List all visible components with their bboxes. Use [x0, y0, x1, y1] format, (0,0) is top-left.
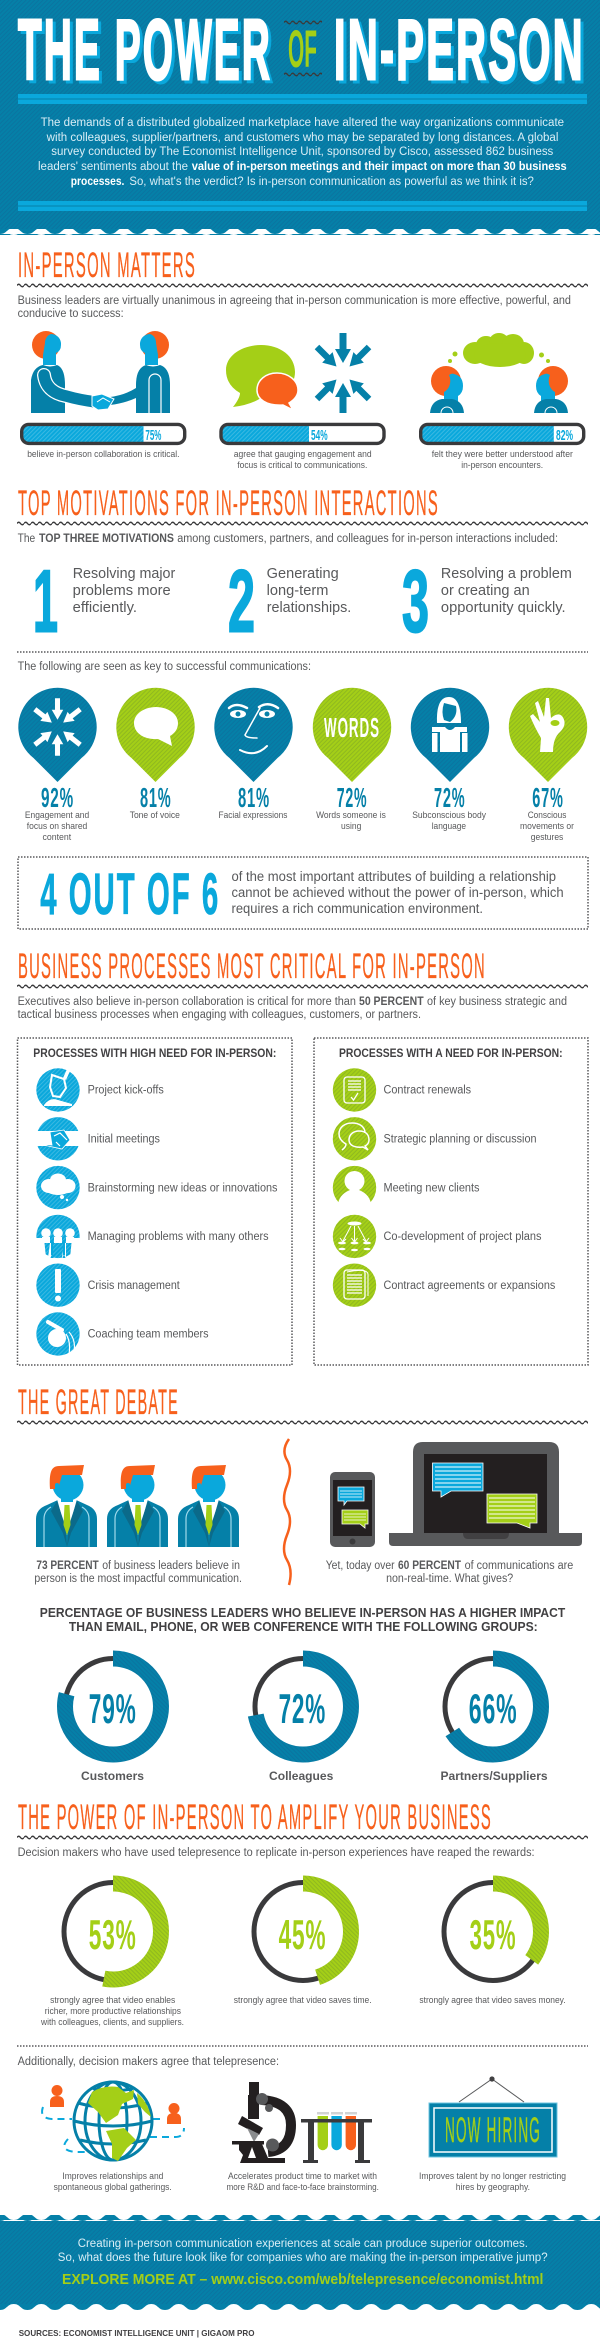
callout: 4 out of 6: 4 OUT OF 6: [40, 862, 220, 927]
icon: converging arrows: [312, 333, 374, 413]
donut: 53%: [40, 1882, 184, 2027]
callout: 4 out of 6: cannot be achieved without the power of in-person, which: [232, 885, 564, 900]
text: 60 percent: Yet, today over: [326, 1560, 395, 1572]
captions: telepresence benefits: Improves talent by no longer restricting: [419, 2171, 566, 2181]
footer banner: [0, 2215, 600, 2310]
donut: customers 79%: Customers: [81, 1769, 144, 1783]
section heading: the great debate: [17, 1383, 588, 1425]
section heading: the great debate: THE GREAT DEBATE: [18, 1383, 179, 1422]
icon: chat bubbles: [226, 345, 298, 410]
icon: phone: [330, 1472, 375, 1547]
donut: 53%: strongly agree that video enables: [50, 1995, 176, 2005]
pin: words 72%: using: [341, 821, 361, 831]
panel: processes with a need: [314, 1038, 588, 1365]
donut: customers 79%: [65, 1658, 161, 1783]
motivation 1: [33, 552, 175, 650]
section heading: in-person matters: [17, 246, 588, 288]
pin: gestures 67%: Conscious: [528, 810, 567, 820]
donut: partners/suppliers 66%: Partners/Suppliers: [440, 1769, 548, 1783]
donut: 45%: strongly agree that video saves time.: [234, 1995, 372, 2005]
header banner: [0, 0, 600, 235]
pin: tone of voice 81%: 81%: [140, 782, 172, 813]
subheading: percentage of business leaders: PERCENTAGE OF BUSINESS LEADERS WHO BELIEVE IN-PERSON HAS A HIGHER IMPACT: [40, 1605, 565, 1620]
business processes text: 50 PERCENT: [359, 996, 424, 1008]
business processes text: Executives also believe in-person collaboration is critical for more than: [18, 996, 356, 1008]
motivation 3: [402, 552, 572, 650]
captions: telepresence benefits: Improves relationships and: [62, 2171, 163, 2181]
intro paragraph: value of in-person meetings and their impact on more than 30 business: [192, 161, 567, 173]
bar captions: believe in-person collaboration is critical.: [27, 449, 180, 459]
motivations intro: among customers, partners, and colleagues for in-person interactions included:: [177, 533, 558, 545]
progress bar 54%: 54%: [311, 427, 328, 444]
pin: tone of voice 81%: [116, 688, 195, 820]
panel: high need processes: PROCESSES WITH HIGH NEED FOR IN-PERSON:: [33, 1048, 276, 1060]
item: crisis management: [36, 1264, 181, 1307]
pin: engagement 92%: Engagement and: [25, 810, 89, 820]
bar captions: focus is critical to communications.: [237, 460, 367, 470]
title: THE POWER: [18, 3, 272, 98]
title: THE POWER: [21, 6, 275, 101]
intro paragraph: with colleagues, supplier/partners, and customers who may be separated by long distances. A global: [46, 132, 558, 144]
motivation 1: Resolving major: [73, 566, 175, 582]
footer banner: EXPLORE MORE AT – www.cisco.com/web/telepresence/economist.html: [62, 2272, 543, 2288]
motivations intro: TOP THREE MOTIVATIONS: [39, 533, 174, 545]
item: meeting new clients: Meeting new clients: [384, 1182, 480, 1194]
icon: handshake: [31, 331, 170, 413]
motivation 3: opportunity quickly.: [441, 600, 566, 616]
captions: telepresence benefits: more R&D and face-to-face brainstorming.: [226, 2182, 379, 2192]
in-person matters text: [18, 295, 571, 320]
pin: words 72%: [313, 688, 391, 831]
amplify intro: Decision makers who have used telepresence to replicate in-person experiences have reaped the rewards:: [18, 1847, 535, 1859]
motivation 1: efficiently.: [73, 600, 137, 616]
donut: 45%: [234, 1882, 372, 2005]
item: initial meetings: [36, 1117, 160, 1161]
callout: 4 out of 6: of the most important attributes of building a relationship: [232, 869, 556, 884]
item: contract agreements: [333, 1264, 556, 1307]
sources: SOURCES: ECONOMIST INTELLIGENCE UNIT | GIGAOM PRO: [19, 2328, 255, 2338]
pin: words 72%: WORDS: [324, 712, 380, 743]
text: 73 percent: 73 PERCENT: [36, 1560, 99, 1572]
item: project kick-offs: [36, 1068, 164, 1112]
icon: thought cloud and two people: [430, 333, 568, 413]
donut: partners/suppliers 66%: 66%: [469, 1685, 517, 1732]
business processes text: of key business strategic and: [427, 996, 567, 1008]
text: 60 percent: of communications are: [465, 1560, 573, 1572]
pin: gestures 67%: [509, 688, 587, 842]
pin: gestures 67%: gestures: [531, 832, 564, 842]
progress bar 54%: [221, 424, 384, 444]
donut: 35%: 35%: [470, 1911, 516, 1958]
pin: body language 72%: Subconscious body: [412, 810, 486, 820]
intro paragraph: So, what's the verdict? Is in-person communication as powerful as we think it is?: [129, 176, 534, 188]
item: crisis management: Crisis management: [88, 1280, 181, 1292]
panel: high need processes: [18, 1038, 292, 1365]
donut: colleagues 72%: [255, 1658, 351, 1783]
donut: partners/suppliers 66%: [440, 1658, 548, 1783]
motivation 2: [228, 552, 351, 650]
motivation 1: problems more: [73, 583, 171, 599]
bar captions: [27, 449, 573, 470]
item: meeting new clients: [333, 1166, 480, 1212]
item: strategic planning: Strategic planning or discussion: [384, 1134, 536, 1146]
donut: 35%: [419, 1882, 566, 2005]
text: 73 percent: [34, 1560, 242, 1585]
text: 73 percent: person is the most impactful communication.: [34, 1573, 242, 1585]
progress bar 75%: [22, 424, 185, 444]
donut: 53%: richer, more productive relationships: [45, 2006, 181, 2016]
icon: laptop: [389, 1442, 582, 1546]
progress bar 82%: [421, 424, 584, 444]
item: contract renewals: [333, 1068, 471, 1112]
icon: globe with people: [42, 2082, 184, 2161]
business processes text: [18, 996, 567, 1021]
intro paragraph: The demands of a distributed globalized marketplace have altered the way organizations communicate: [41, 117, 564, 129]
motivations intro: [18, 533, 558, 545]
text: 60 percent: [326, 1560, 573, 1585]
title: OF: [288, 20, 317, 79]
item: coaching: Coaching team members: [88, 1329, 209, 1341]
icon: microscope: [232, 2082, 291, 2163]
donut: 45%: 45%: [279, 1911, 326, 1958]
subheading: percentage of business leaders: THAN EMAIL, PHONE, OR WEB CONFERENCE WITH THE FOLLOWING GROUPS:: [69, 1619, 538, 1634]
motivation 3: 3: [402, 552, 429, 650]
item: contract renewals: Contract renewals: [384, 1084, 471, 1096]
motivation 3: Resolving a problem: [441, 566, 572, 582]
pin: body language 72%: 72%: [434, 782, 465, 813]
pin: facial expressions 81%: 81%: [238, 782, 270, 813]
intro paragraph: leaders' sentiments about the: [38, 161, 188, 173]
subheading: percentage of business leaders: [40, 1605, 565, 1634]
item: brainstorming: [36, 1166, 278, 1209]
pin: facial expressions 81%: [214, 688, 293, 820]
callout: 4 out of 6: requires a rich communication environment.: [232, 901, 483, 916]
pin: gestures 67%: movements or: [520, 821, 574, 831]
item: co-development: Co-development of project plans: [384, 1231, 542, 1243]
text: 60 percent: non-real-time. What gives?: [386, 1573, 513, 1585]
footer banner: So, what does the future look like for companies who are making the in-person imperative jump?: [58, 2252, 548, 2264]
key communications intro: The following are seen as key to successful communications:: [18, 661, 311, 673]
additional benefits intro: Additionally, decision makers agree that telepresence:: [18, 2056, 279, 2068]
pin: gestures 67%: 67%: [532, 782, 564, 813]
section heading: in-person matters: IN-PERSON MATTERS: [18, 246, 196, 285]
pin: body language 72%: [411, 688, 489, 831]
intro paragraph: processes.: [71, 176, 124, 188]
item: coaching: [36, 1312, 209, 1356]
in-person matters text: conducive to success:: [18, 308, 124, 320]
icon: now hiring sign: [429, 2076, 557, 2157]
business processes text: tactical business processes when engaging with colleagues, customers, or partners.: [18, 1009, 421, 1021]
icon: three business people: [36, 1465, 239, 1547]
pin: engagement 92%: content: [42, 832, 72, 842]
intro paragraph: [38, 117, 567, 188]
item: brainstorming: Brainstorming new ideas or innovations: [88, 1182, 278, 1194]
pin: engagement 92%: 92%: [41, 782, 74, 813]
pin: words 72%: 72%: [337, 782, 367, 813]
item: strategic planning: [333, 1117, 536, 1161]
pin: words 72%: Words someone is: [316, 810, 386, 820]
item: initial meetings: Initial meetings: [88, 1134, 160, 1146]
donut: colleagues 72%: Colleagues: [269, 1769, 334, 1783]
pin: tone of voice 81%: Tone of voice: [130, 810, 180, 820]
progress bar 75%: 75%: [145, 427, 161, 444]
footer banner: Creating in-person communication experiences at scale can produce superior outcomes.: [78, 2238, 528, 2250]
pin: body language 72%: language: [432, 821, 466, 831]
captions: telepresence benefits: [54, 2171, 566, 2192]
callout: 4 out of 6: [18, 857, 588, 929]
motivation 2: long-term: [267, 583, 328, 599]
panel: processes with a need: PROCESSES WITH A NEED FOR IN-PERSON:: [339, 1048, 563, 1060]
intro paragraph: survey conducted by The Economist Intelligence Unit, sponsored by Cisco, assessed 862 business: [51, 146, 554, 158]
text: 73 percent: of business leaders believe in: [102, 1560, 240, 1572]
donut: colleagues 72%: 72%: [279, 1685, 326, 1732]
progress bar 82%: 82%: [556, 427, 573, 444]
in-person matters text: Business leaders are virtually unanimous in agreeing that in-person communication is more effective, powerful, and: [18, 295, 571, 307]
pin: engagement 92%: [18, 688, 97, 842]
item: managing problems: Managing problems with many others: [88, 1231, 269, 1243]
bar captions: agree that gauging engagement and: [234, 449, 372, 459]
motivation 1: 1: [33, 552, 58, 650]
donut: customers 79%: 79%: [89, 1685, 137, 1732]
text: 60 percent: 60 PERCENT: [398, 1560, 461, 1572]
motivation 2: Generating: [267, 566, 339, 582]
item: co-development: [333, 1215, 542, 1258]
motivation 2: 2: [228, 552, 255, 650]
bar captions: felt they were better understood after: [432, 449, 573, 459]
donut: 35%: strongly agree that video saves money.: [419, 1995, 566, 2005]
item: contract agreements: Contract agreements or expansions: [384, 1280, 556, 1292]
bar captions: in-person encounters.: [461, 460, 543, 470]
motivations intro: The: [18, 533, 35, 545]
pin: facial expressions 81%: Facial expressions: [218, 810, 288, 820]
captions: telepresence benefits: spontaneous global gatherings.: [54, 2182, 172, 2192]
donut: 53%: with colleagues, clients, and suppliers.: [40, 2017, 184, 2027]
pin: engagement 92%: focus on shared: [27, 821, 87, 831]
motivation 3: or creating an: [441, 583, 530, 599]
item: project kick-offs: Project kick-offs: [88, 1084, 164, 1096]
motivation 2: relationships.: [267, 600, 351, 616]
donut: 53%: 53%: [89, 1911, 137, 1958]
item: managing problems: [36, 1215, 269, 1258]
captions: telepresence benefits: hires by geography.: [456, 2182, 530, 2192]
squiggle divider: [284, 1439, 291, 1585]
captions: telepresence benefits: Accelerates product time to market with: [228, 2171, 377, 2181]
icon: test tube rack: [301, 2112, 372, 2163]
